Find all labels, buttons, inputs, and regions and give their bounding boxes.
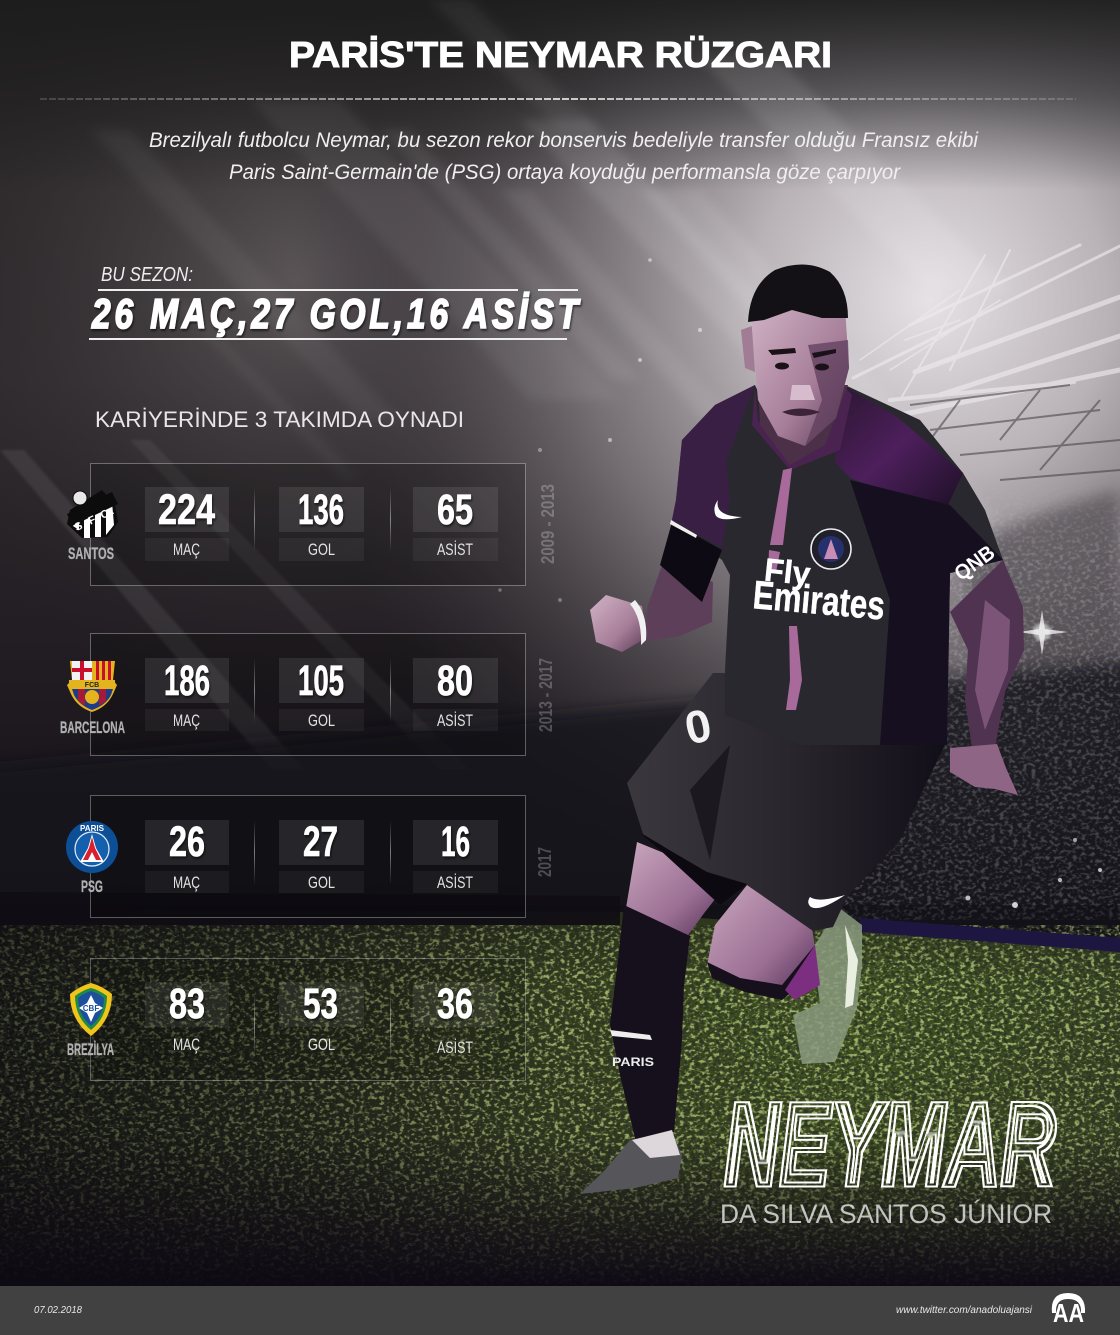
- sock: [610, 905, 690, 1142]
- title divider: [40, 98, 1076, 100]
- years: 2017: [535, 847, 555, 877]
- stats: 186: [164, 657, 210, 705]
- panel: Santos: [67, 464, 558, 586]
- stats: 105: [298, 657, 344, 705]
- pink centre stripe: [768, 468, 802, 710]
- left arm and fist: [590, 565, 713, 652]
- season summary: 26 MAÇ,27 GOL,16 ASİST: [91, 290, 582, 337]
- collar: [752, 388, 852, 470]
- light streaks: [90, 0, 1010, 520]
- stats: [164, 657, 473, 730]
- crest: [811, 529, 851, 569]
- stats: ASİST: [437, 540, 473, 559]
- stats: GOL: [308, 711, 335, 730]
- years: 2009 - 2013: [538, 484, 558, 564]
- player name: DA SILVA SANTOS JÚNIOR: [720, 1198, 1052, 1229]
- stats: [169, 980, 473, 1057]
- stats: 224: [158, 486, 215, 534]
- pitch: [0, 892, 1120, 1286]
- shorts number: 0: [680, 698, 716, 755]
- stats: ASİST: [437, 1038, 473, 1057]
- stats: 26: [169, 818, 205, 866]
- back boot: [793, 907, 862, 1064]
- section heading: KARİYERİNDE 3 TAKIMDA OYNADI: [95, 407, 464, 432]
- jersey swoosh: [714, 500, 742, 519]
- icon: Brazil CBF crest: [70, 983, 112, 1036]
- stats: GOL: [308, 540, 335, 559]
- sock text: PARIS: [612, 1055, 654, 1069]
- intro text: Paris Saint-Germain'de (PSG) ortaya koyduğu performansla göze çarpıyor: [229, 161, 901, 184]
- stats: 16: [441, 818, 470, 866]
- sponsor: Fly: [763, 551, 812, 592]
- intro text: Brezilyalı futbolcu Neymar, bu sezon rekor bonservis bedeliyle transfer olduğu Fransız ekibi: [149, 129, 979, 152]
- stats: [169, 818, 473, 892]
- stats: GOL: [308, 1035, 335, 1054]
- icon: PSG crest: [66, 821, 118, 873]
- stats: 27: [303, 818, 338, 866]
- stats: [158, 486, 473, 559]
- shorts: [627, 673, 948, 931]
- player illustration: Neymar: [580, 264, 1024, 1194]
- stats: GOL: [308, 873, 335, 892]
- panel: Brezilya: [67, 958, 526, 1080]
- right arm: [950, 560, 1024, 795]
- nike swoosh: [808, 895, 845, 908]
- icon: Brazil CBF crest: CBF: [83, 1004, 99, 1013]
- QNB: QNB: [950, 541, 999, 586]
- icon: AA logo: AA: [1053, 1298, 1084, 1328]
- stats: MAÇ: [173, 873, 200, 892]
- stats: 65: [437, 486, 473, 534]
- team name: PSG: [81, 877, 103, 896]
- stats: ASİST: [437, 711, 473, 730]
- title: PARİS'TE NEYMAR RÜZGARI: [289, 34, 832, 75]
- season summary: [89, 264, 582, 339]
- jersey: [660, 385, 1003, 745]
- footer: [0, 1286, 1120, 1335]
- season summary: BU SEZON:: [101, 264, 193, 286]
- standing leg: [580, 842, 730, 1194]
- stats: MAÇ: [173, 1035, 200, 1054]
- icon: PSG crest: PARIS: [80, 823, 104, 833]
- stats: 83: [169, 980, 205, 1028]
- stats: MAÇ: [173, 540, 200, 559]
- standing boot: [580, 1132, 682, 1194]
- stats: ASİST: [437, 873, 473, 892]
- stand lattice: [910, 385, 1120, 480]
- stadium roof: [853, 245, 1120, 415]
- icon: Barcelona crest: [67, 661, 117, 712]
- sponsor: Emirates: [751, 573, 887, 629]
- head: [741, 264, 849, 465]
- sponsor: [751, 551, 887, 629]
- panel: Barcelona: [60, 634, 556, 756]
- icon: Barcelona crest: FCB: [85, 682, 99, 689]
- team name: BREZİLYA: [67, 1040, 114, 1059]
- crowd stand: [0, 480, 1120, 950]
- stats: MAÇ: [173, 711, 200, 730]
- team name: SANTOS: [68, 544, 114, 563]
- source: www.twitter.com/anadoluajansi: [896, 1304, 1033, 1316]
- years: 2013 - 2017: [536, 658, 556, 732]
- stats: 136: [298, 486, 344, 534]
- intro text: [149, 129, 979, 184]
- stats: 53: [303, 980, 338, 1028]
- icon: Santos crest: S.F.C.: [73, 505, 116, 534]
- stats: 36: [437, 980, 473, 1028]
- brows and eyes: [768, 348, 836, 358]
- date: 07.02.2018: [34, 1304, 82, 1316]
- sparkles: [498, 258, 1102, 908]
- panel: PSG: [66, 796, 555, 918]
- stats: 80: [437, 657, 473, 705]
- team name: BARCELONA: [60, 718, 125, 737]
- icon: Santos crest: [67, 490, 118, 538]
- back leg: [707, 885, 862, 1064]
